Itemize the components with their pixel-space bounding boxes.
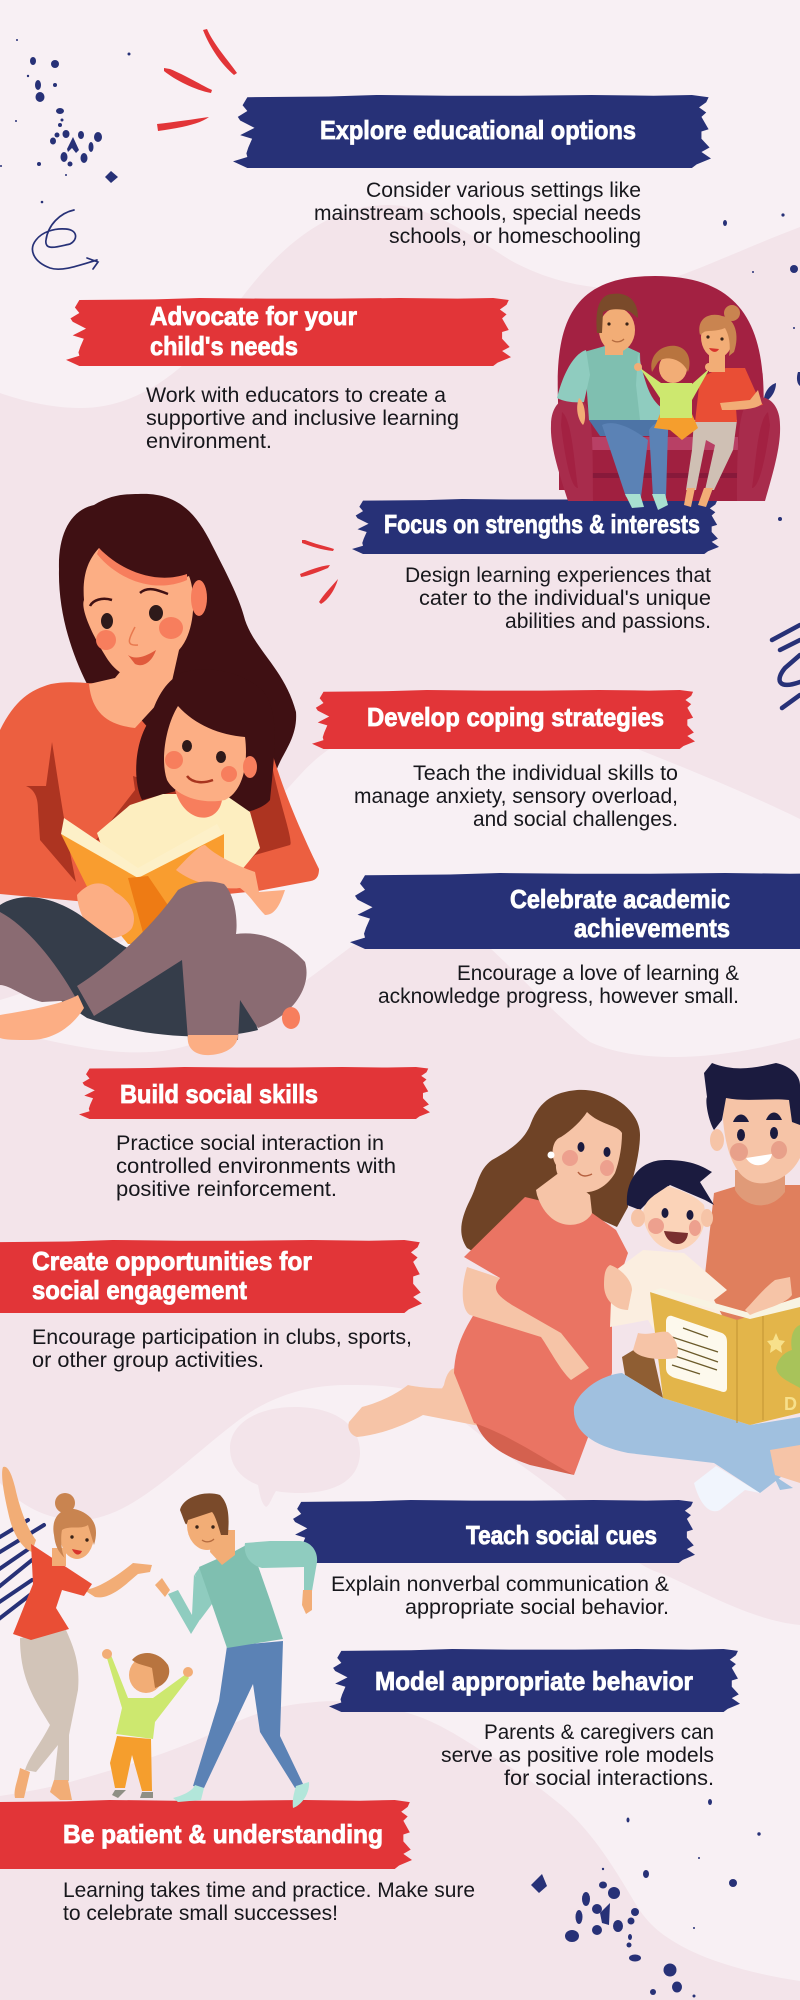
- body text: appropriate social behavior.: [405, 1596, 669, 1619]
- body text: environment.: [146, 430, 272, 453]
- father neck: [735, 1170, 785, 1205]
- dancing mother: [2, 1467, 152, 1800]
- banner: [350, 873, 800, 949]
- dancing father: [155, 1493, 317, 1808]
- feet: [0, 995, 300, 1055]
- body text: Work with educators to create a: [146, 384, 446, 407]
- banner: [0, 1240, 422, 1313]
- mother head: [548, 1112, 622, 1192]
- mother hair: [59, 494, 296, 812]
- body text: positive reinforcement.: [116, 1178, 337, 1201]
- heading: social engagement: [32, 1275, 247, 1305]
- panel: be patient and understanding: [0, 1800, 475, 1925]
- illustration: family on sofa: [551, 276, 780, 510]
- mother hand on son: [604, 1265, 632, 1310]
- ink scribble: right edge: [772, 625, 800, 708]
- body text: Consider various settings like: [366, 179, 641, 202]
- crossed legs: mauve: [0, 882, 307, 1040]
- mother hands: [77, 845, 285, 939]
- sofa: [551, 276, 780, 501]
- father: [557, 294, 668, 510]
- illustration: dancing family: [2, 1467, 317, 1808]
- illustration: parents and son reading: [348, 1063, 800, 1511]
- body text: Practice social interaction in: [116, 1132, 384, 1155]
- banner: [352, 499, 719, 554]
- body text: schools, or homeschooling: [389, 225, 641, 248]
- body text: [331, 1573, 669, 1619]
- body text: or other group activities.: [32, 1349, 264, 1372]
- panel: explore educational options: [233, 95, 711, 248]
- storybook: [650, 1288, 800, 1425]
- panel: build social skills: [79, 1067, 430, 1201]
- daughter shirt: [97, 794, 260, 880]
- mother neck: [536, 1172, 592, 1225]
- body text: Parents & caregivers can: [484, 1721, 714, 1744]
- body text: [441, 1721, 714, 1790]
- illustration: mother and daughter reading: [0, 494, 319, 1055]
- body text: serve as positive role models: [441, 1744, 714, 1767]
- body text: Learning takes time and practice. Make sure: [63, 1879, 475, 1902]
- heading: [32, 1246, 312, 1305]
- heading: Develop coping strategies: [367, 702, 664, 732]
- body text: controlled environments with: [116, 1155, 396, 1178]
- father head: [704, 1063, 800, 1183]
- body text: [314, 179, 641, 248]
- dancing child: [102, 1649, 193, 1798]
- body text: manage anxiety, sensory overload,: [354, 785, 678, 808]
- mother neck: [89, 650, 179, 728]
- red sparks: beside mother: [300, 540, 338, 604]
- body text: and social challenges.: [473, 808, 678, 831]
- heading: Focus on strengths & interests: [384, 509, 700, 539]
- body text: [146, 384, 459, 453]
- body text: Explain nonverbal communication &: [331, 1573, 669, 1596]
- red sparks: top: [157, 29, 237, 131]
- banner: [329, 1649, 740, 1712]
- heading: Create opportunities for: [32, 1246, 312, 1276]
- banner: [66, 298, 511, 366]
- mother hair: [461, 1090, 640, 1273]
- heading: Explore educational options: [320, 115, 636, 145]
- heading: Advocate for your: [150, 301, 357, 331]
- son shirt: [610, 1250, 735, 1340]
- son's hand and father's hand: [633, 1277, 792, 1359]
- open book: [61, 818, 224, 946]
- panel: model appropriate behavior: [329, 1649, 740, 1790]
- banner: [233, 95, 711, 168]
- decorative speech bubble: [230, 1407, 360, 1507]
- ink scribble: behind dancing mother: [0, 1520, 44, 1622]
- jeans: [574, 1340, 800, 1511]
- mother sweater: [0, 682, 319, 905]
- child: [634, 346, 713, 440]
- ink splatter: top left: [0, 39, 130, 203]
- body text: cater to the individual's unique: [419, 587, 711, 610]
- body text: supportive and inclusive learning: [146, 407, 459, 430]
- banner: [79, 1067, 430, 1119]
- body text: acknowledge progress, however small.: [378, 985, 739, 1008]
- body text: abilities and passions.: [505, 610, 711, 633]
- panel: create opportunities for social engagement: [0, 1240, 422, 1372]
- heading: Celebrate academic: [510, 884, 730, 914]
- son head: [627, 1160, 714, 1250]
- father shirt: [700, 1185, 800, 1320]
- crossed legs: dark: [0, 897, 258, 1036]
- banner: [312, 690, 695, 749]
- body text: Encourage participation in clubs, sports,: [32, 1326, 412, 1349]
- panel: focus on strengths and interests: [352, 499, 719, 633]
- body text: mainstream schools, special needs: [314, 202, 641, 225]
- panel: develop coping strategies: [312, 690, 695, 831]
- body text: Encourage a love of learning &: [457, 962, 739, 985]
- daughter collar and neck: [175, 790, 222, 818]
- body text: for social interactions.: [504, 1767, 714, 1790]
- ink splatter: right edge: [723, 213, 800, 521]
- mother face: [83, 548, 207, 678]
- body text: [63, 1879, 475, 1925]
- panel: teach social cues: [289, 1500, 695, 1619]
- heading: Model appropriate behavior: [375, 1666, 693, 1696]
- body text: to celebrate small successes!: [63, 1902, 338, 1925]
- heading: child's needs: [150, 331, 298, 361]
- banner: [289, 1500, 695, 1563]
- mother arm: [463, 1267, 589, 1380]
- mother legs: [348, 1368, 500, 1437]
- ink splatter: bottom right: [531, 1799, 761, 1998]
- heading: Teach social cues: [466, 1520, 657, 1550]
- panel: celebrate academic achievements: [350, 873, 800, 1008]
- body text: [405, 564, 711, 633]
- daughter face: [164, 706, 257, 801]
- panel: advocate for your child's needs: [66, 298, 511, 453]
- body text: [32, 1326, 412, 1372]
- body text: [378, 962, 739, 1008]
- mother dress: [454, 1197, 628, 1475]
- heading: Be patient & understanding: [63, 1819, 383, 1849]
- body text: Design learning experiences that: [405, 564, 711, 587]
- icon: spiral arrow: [32, 210, 98, 269]
- heading: [510, 884, 730, 943]
- heading: achievements: [574, 913, 730, 943]
- body text: [354, 762, 678, 831]
- body text: [116, 1132, 396, 1201]
- heading: [150, 301, 357, 361]
- sweater shading: [26, 725, 291, 882]
- daughter hair: [136, 669, 275, 813]
- mother: [684, 305, 763, 507]
- heading: Build social skills: [120, 1079, 318, 1109]
- banner: [0, 1800, 412, 1869]
- storybook: D: [784, 1394, 797, 1414]
- body text: Teach the individual skills to: [413, 762, 678, 785]
